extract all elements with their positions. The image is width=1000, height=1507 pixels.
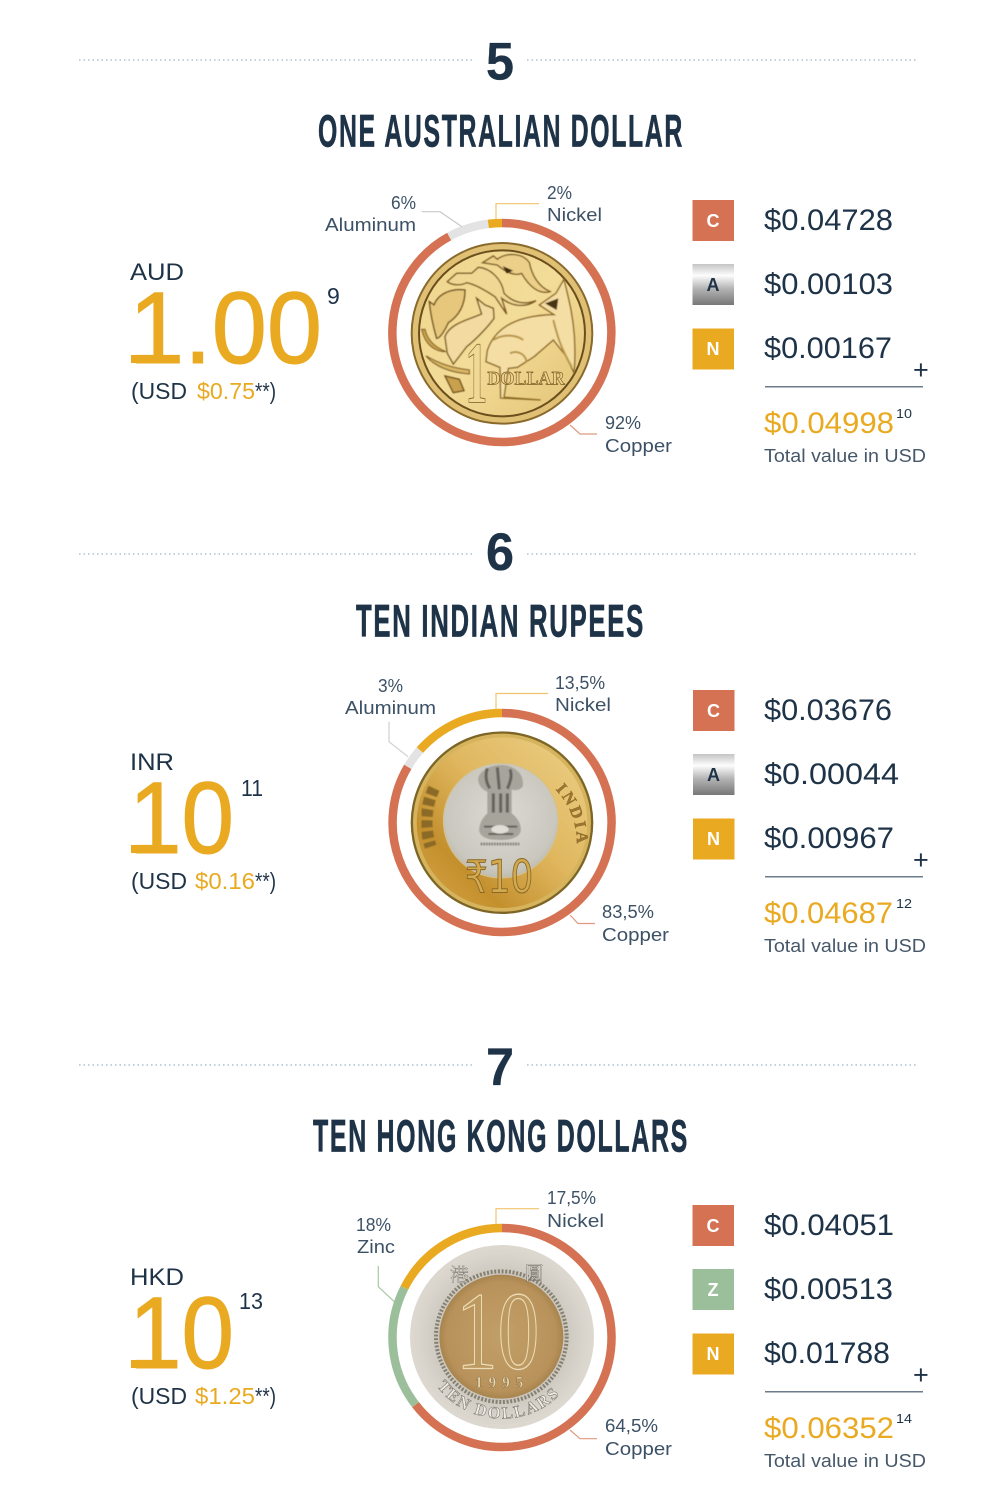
coin: Australian one dollar: [411, 242, 593, 425]
composition ring chart: [378, 1209, 612, 1447]
composition ring chart: [392, 204, 611, 442]
face value block: **): [255, 378, 276, 404]
metal values: $0.00044: [764, 758, 899, 791]
metal values: 14: [896, 1411, 912, 1426]
metal values: 10: [896, 406, 912, 421]
ring labels: 92%: [605, 413, 641, 433]
metal values: $0.00167: [764, 332, 892, 365]
face value block: 1.00: [129, 271, 322, 385]
title: ONE AUSTRALIAN DOLLAR: [318, 106, 684, 156]
ring labels: 18%: [356, 1215, 391, 1235]
face value block: **): [255, 1383, 276, 1409]
metal values: [692, 200, 929, 466]
coin text: INDIA: INDIA: [556, 782, 588, 844]
metal values: [693, 690, 929, 956]
metal values: $0.00513: [764, 1273, 893, 1306]
metal values: $0.00967: [764, 822, 894, 855]
ring labels: 83,5%: [602, 902, 654, 922]
ring labels: [345, 673, 669, 945]
face value block: $0.75: [197, 378, 255, 404]
title: TEN HONG KONG DOLLARS: [313, 1110, 689, 1162]
coin: Indian ten rupees: [410, 731, 594, 914]
ring labels: Copper: [605, 1439, 672, 1459]
rank number: 5: [486, 32, 514, 92]
face value block: $1.25: [195, 1383, 255, 1409]
divider line right: [527, 553, 917, 555]
metal values: Total value in USD: [764, 446, 926, 466]
ring labels: [325, 183, 672, 456]
coin: Australian one dollar: 1: [465, 325, 487, 423]
metal values: $0.04728: [764, 204, 893, 237]
ring labels: Copper: [605, 436, 672, 456]
coin text: rupee value: ₹10: [465, 850, 533, 903]
metal values: N: [707, 829, 720, 849]
face value block: HKD: [130, 1264, 184, 1291]
face value block: 10: [129, 761, 234, 875]
metal values: $0.01788: [764, 1337, 890, 1370]
face value block: $0.16: [195, 868, 255, 894]
coin text: ten dollars: TEN DOLLARS: [438, 1379, 558, 1419]
metal values: N: [706, 1344, 720, 1364]
metal values: N: [706, 339, 720, 359]
divider line right: [527, 1064, 917, 1066]
ring labels: Nickel: [547, 205, 602, 225]
face value block: (USD: [131, 1383, 187, 1409]
ring labels: Copper: [602, 925, 669, 945]
face value block: 11: [241, 775, 263, 801]
divider line left: [79, 59, 475, 61]
metal values: [692, 1205, 929, 1471]
section 5: one Australian dollar: [79, 32, 929, 466]
face value block: (USD: [131, 868, 187, 894]
ring labels: 64,5%: [605, 1416, 658, 1436]
metal values: +: [913, 355, 929, 385]
ring labels: [356, 1188, 672, 1459]
composition ring chart: [389, 694, 612, 932]
coin: Hong Kong ten dollars: [410, 1245, 594, 1429]
face value block: **): [255, 868, 276, 894]
coin text: year: 1995: [475, 1375, 524, 1392]
divider line right: [527, 59, 917, 61]
coin text: 10: 10: [456, 1270, 539, 1393]
divider line left: [79, 1064, 475, 1066]
face value block: AUD: [130, 259, 184, 286]
face value block: INR: [130, 749, 174, 776]
face value block: [129, 1264, 276, 1409]
metal values: $0.06352: [764, 1412, 894, 1445]
face value block: 9: [327, 283, 340, 309]
section 7: ten Hong Kong dollars: [79, 1038, 929, 1471]
metal values: Total value in USD: [764, 936, 926, 956]
ring labels: 13,5%: [555, 673, 605, 693]
divider line left: [79, 553, 475, 555]
face value block: 13: [239, 1288, 263, 1314]
coin text: Chinese characters: 港: [450, 1262, 469, 1288]
metal values: +: [913, 845, 929, 875]
metal values: $0.03676: [764, 694, 892, 727]
metal values: A: [707, 765, 720, 785]
ring labels: 6%: [391, 193, 416, 213]
ring labels: Zinc: [357, 1237, 395, 1257]
metal values: C: [707, 701, 720, 721]
coin text: DOLLAR: DOLLAR: [487, 369, 566, 390]
metal values: A: [706, 275, 720, 295]
metal values: 12: [896, 896, 912, 911]
metal values: Total value in USD: [764, 1451, 926, 1471]
ring labels: 17,5%: [547, 1188, 596, 1208]
ring labels: Nickel: [555, 695, 611, 715]
metal values: C: [706, 211, 720, 231]
face value block: [129, 749, 276, 894]
metal values: Z: [708, 1280, 718, 1300]
ring labels: Aluminum: [345, 698, 436, 718]
face value block: 10: [129, 1276, 234, 1390]
ring labels: 3%: [378, 676, 403, 696]
ring labels: Nickel: [547, 1211, 604, 1231]
metal values: $0.04687: [764, 897, 893, 930]
rank number: 6: [486, 523, 514, 582]
title: TEN INDIAN RUPEES: [356, 596, 645, 646]
metal values: C: [706, 1216, 720, 1236]
metal values: +: [913, 1360, 929, 1390]
ring labels: 2%: [547, 183, 572, 203]
rank number: 7: [486, 1038, 514, 1097]
metal values: $0.04998: [764, 407, 894, 440]
metal values: $0.04051: [764, 1209, 894, 1242]
face value block: (USD: [131, 378, 187, 404]
metal values: $0.00103: [764, 268, 893, 301]
ring labels: Aluminum: [325, 215, 416, 235]
coin text: Chinese character right: 圓: [525, 1260, 544, 1286]
section 6: ten Indian rupees: [79, 523, 929, 956]
